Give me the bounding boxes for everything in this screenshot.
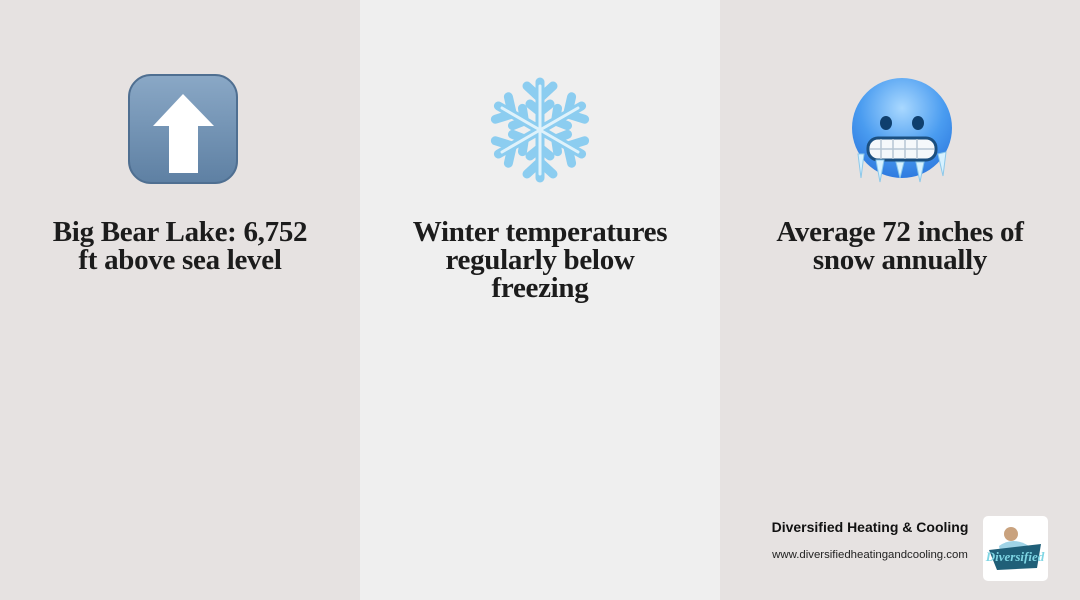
- heading: temperatures: Winter temperatures: [413, 216, 667, 248]
- heading: temperatures: regularly below: [445, 244, 635, 276]
- heading: temperatures: [413, 216, 667, 304]
- icon: snowflake: [490, 78, 590, 182]
- logo: [983, 516, 1048, 581]
- heading: snowfall: snow annually: [813, 244, 987, 276]
- heading: temperatures: freezing: [492, 272, 588, 304]
- heading: elevation: [53, 216, 307, 276]
- heading: elevation: ft above sea level: [78, 244, 282, 276]
- panel: temperatures: [360, 0, 720, 600]
- panel: elevation: [0, 0, 360, 600]
- footer: website: www.diversifiedheatingandcooling.com: [772, 549, 968, 561]
- panel: snowfall: [720, 0, 1080, 600]
- logo: Diversified: [985, 549, 1045, 564]
- heading: snowfall: Average 72 inches of: [776, 216, 1024, 248]
- heading: elevation: Big Bear Lake: 6,752: [53, 216, 307, 248]
- icon: up arrow: [128, 74, 238, 184]
- icon: cold face: [852, 78, 952, 182]
- heading: snowfall: [776, 216, 1024, 276]
- footer: brand name: Diversified Heating & Cooling: [772, 519, 968, 535]
